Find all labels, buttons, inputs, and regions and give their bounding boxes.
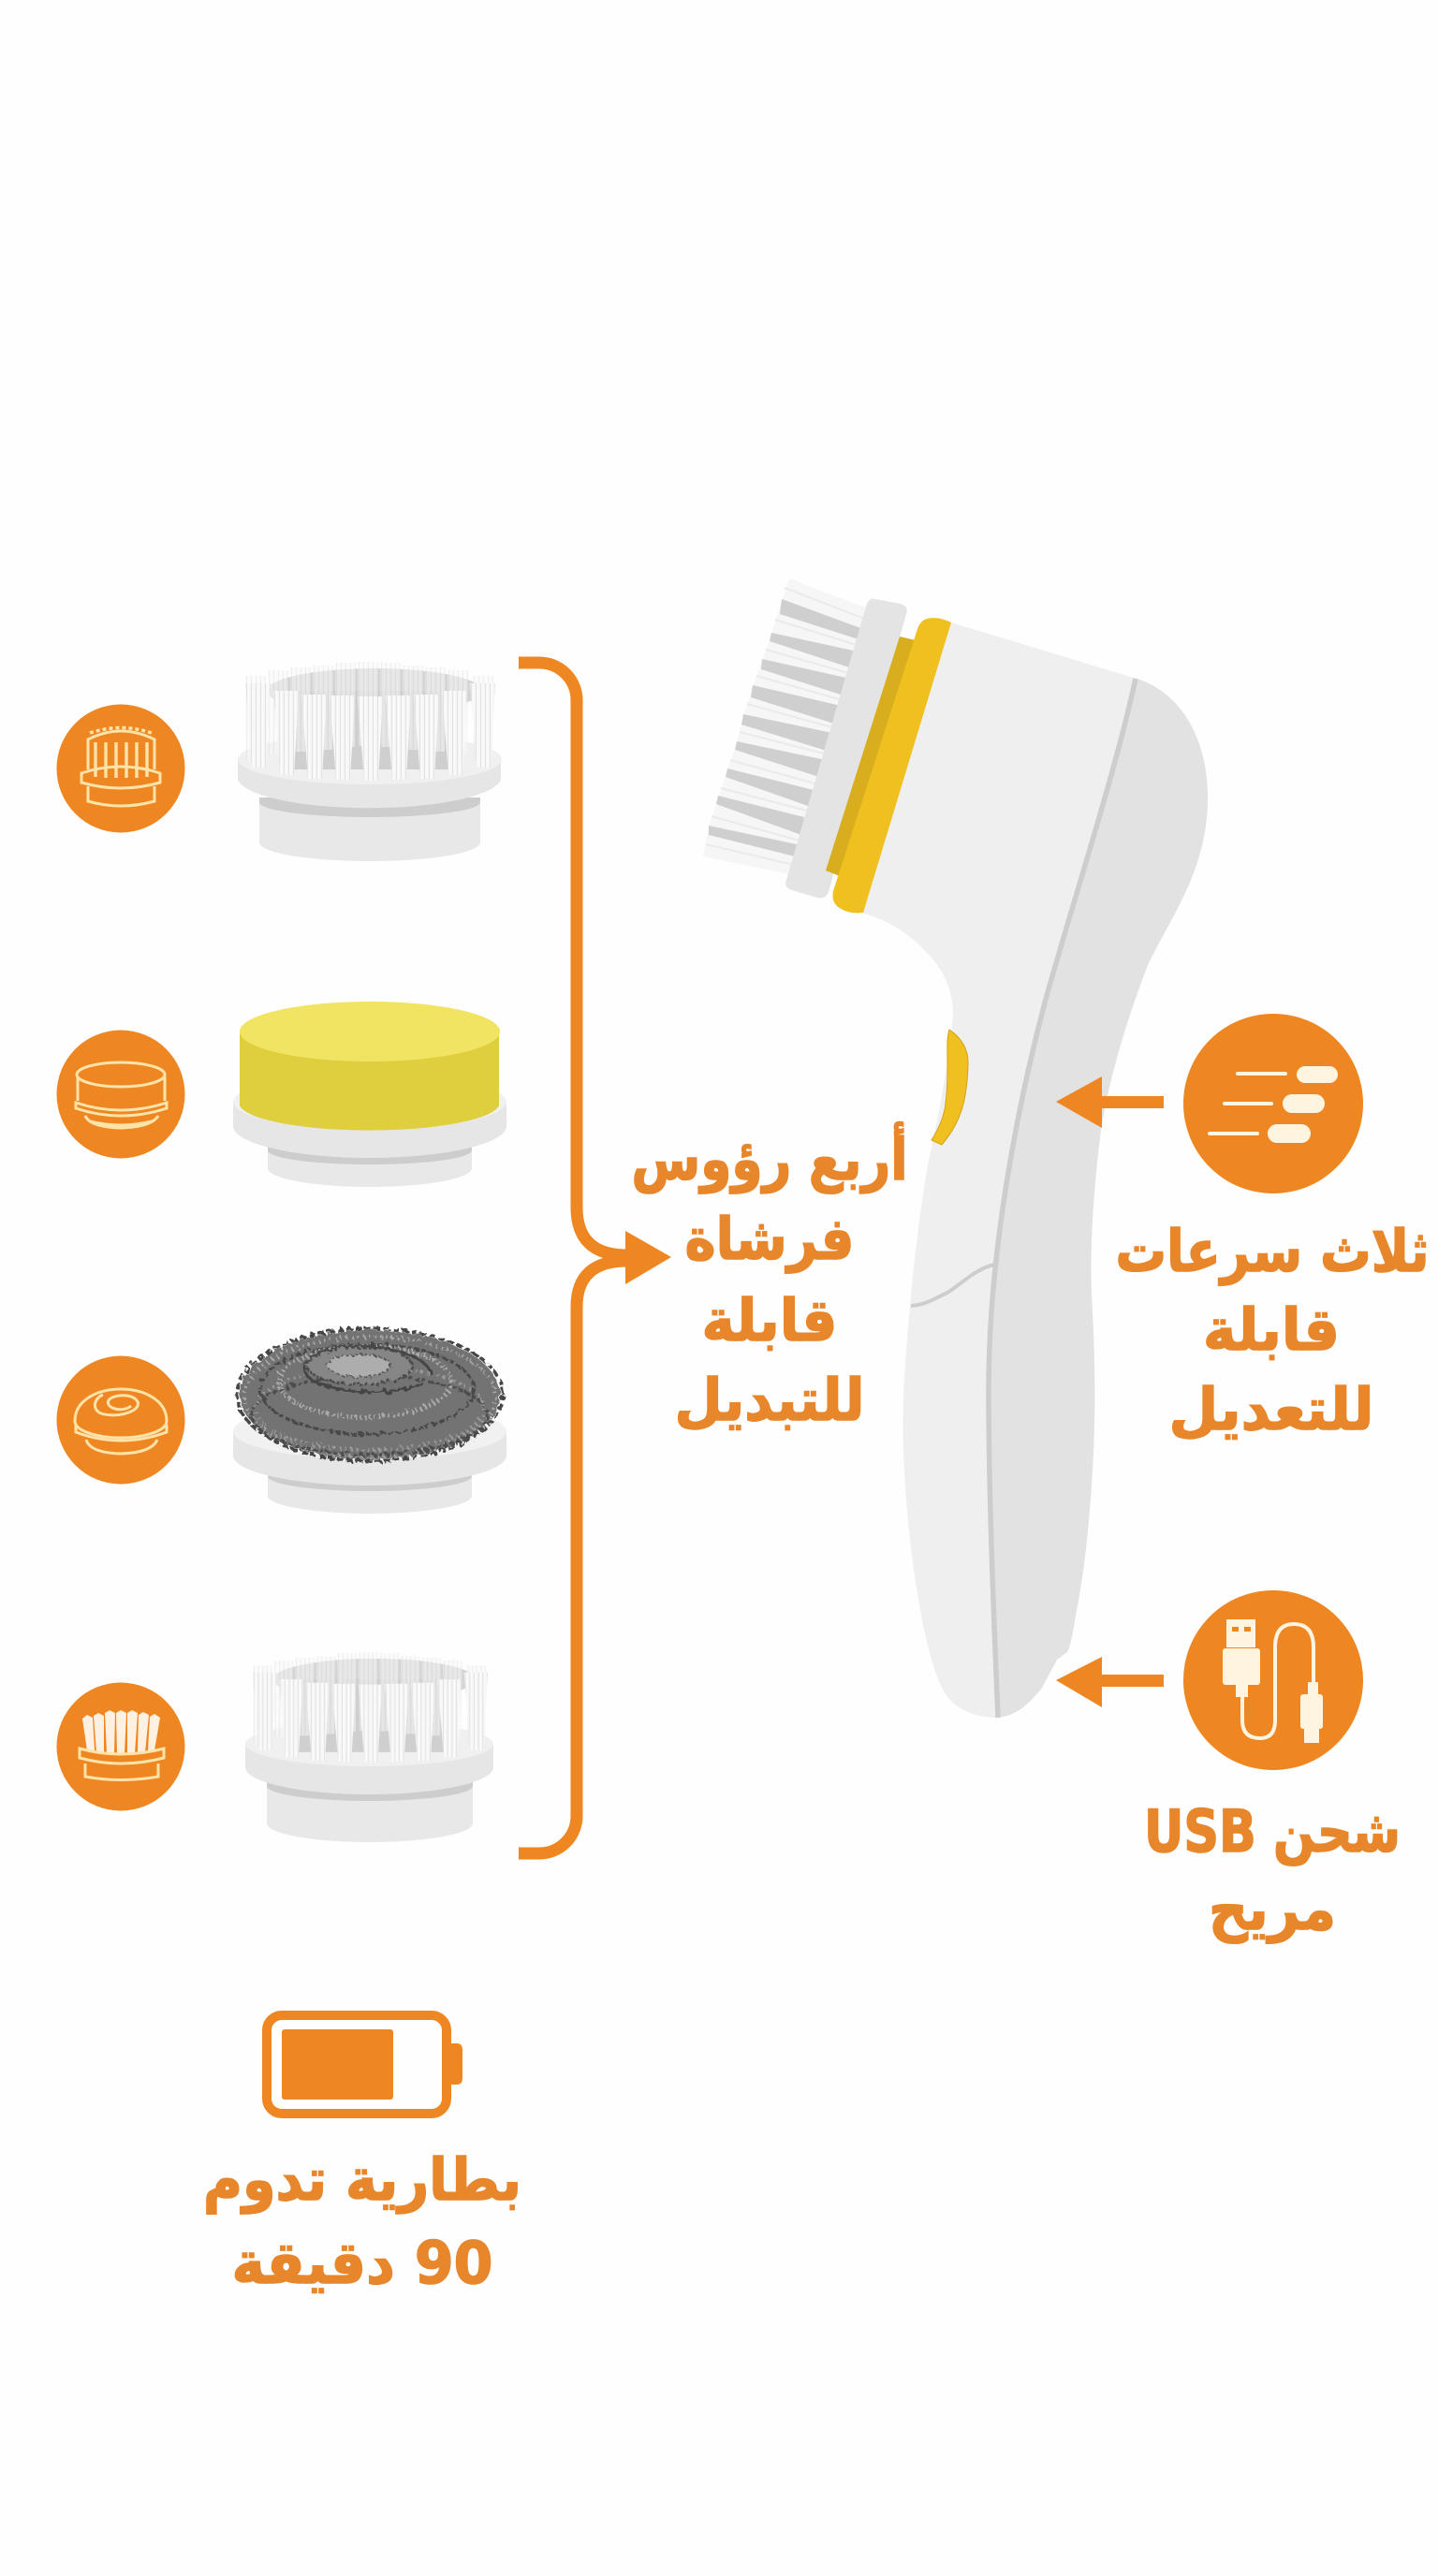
icon: battery [267, 2015, 462, 2114]
arrow to speed control [1056, 1076, 1164, 1128]
cleaning brush device [703, 578, 1208, 1718]
device head plate [785, 599, 907, 898]
body light side [861, 622, 1208, 1718]
dark yellow neck [826, 637, 916, 876]
sponge head [233, 1002, 506, 1187]
icon circle: soft bristle head [56, 1683, 185, 1810]
icon circle: three speeds [1183, 1014, 1363, 1193]
icon circle: steel wool head [56, 1355, 185, 1485]
label: four replaceable brush heads: قابلة [702, 1286, 837, 1354]
icon circle: USB cable [1183, 1590, 1363, 1770]
label: four replaceable brush heads: فرشاة [685, 1205, 854, 1273]
label: battery 90 minutes: بطارية تدوم [203, 2145, 521, 2215]
label: three speeds: قابلة [1203, 1295, 1340, 1364]
icon circle: sponge head [56, 1030, 185, 1159]
icon circle: bristle brush head [56, 704, 185, 833]
label: four replaceable brush heads: أربع رؤوس [631, 1121, 908, 1193]
power button [932, 1030, 968, 1145]
label: battery 90 minutes: 90 دقيقة [232, 2229, 493, 2297]
brush head 1 [238, 662, 502, 861]
body divider seam [989, 679, 1136, 1718]
brush head 4 [245, 1652, 493, 1842]
steel wool head [233, 1328, 506, 1514]
label: USB charging: شحن USB [1144, 1797, 1401, 1866]
bracket with arrow [519, 663, 671, 1853]
label: battery 90 minutes [203, 2145, 521, 2297]
arrow to USB port [1056, 1657, 1164, 1707]
label: three speeds [1116, 1217, 1429, 1443]
label: USB charging: مريح [1209, 1875, 1336, 1943]
label: three speeds: للتعديل [1168, 1375, 1374, 1443]
body shaded side [989, 679, 1208, 1718]
device bristles [703, 578, 873, 875]
body lower seam [911, 1265, 994, 1306]
label: four replaceable brush heads: للتبديل [674, 1366, 865, 1434]
label: four replaceable brush heads [631, 1121, 908, 1434]
yellow collar [833, 618, 951, 913]
label: USB charging [1144, 1797, 1401, 1943]
